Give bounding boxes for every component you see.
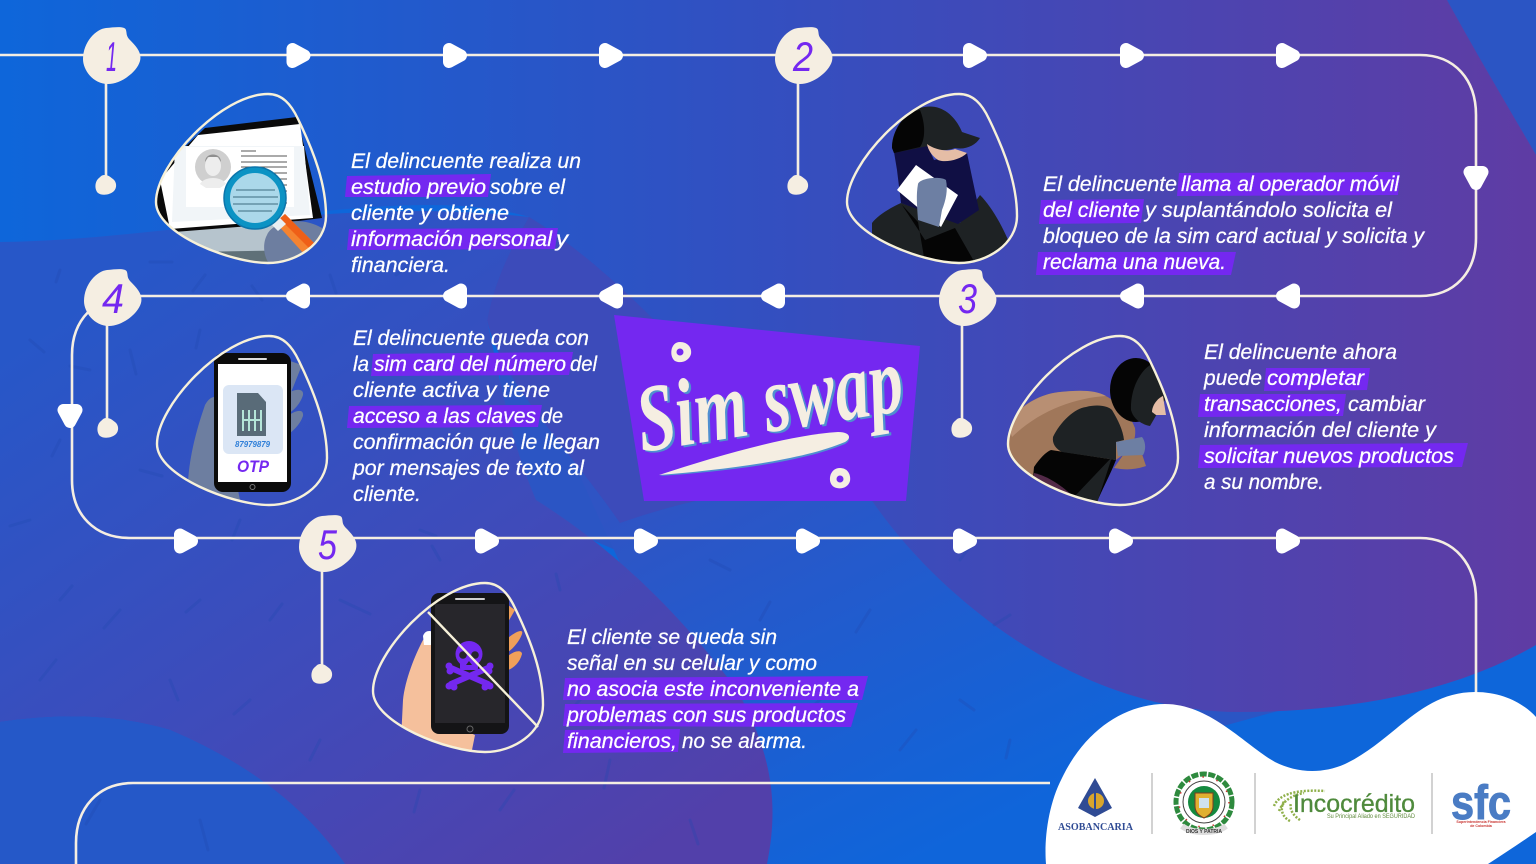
text: step 5: El cliente se queda sin — [567, 626, 777, 649]
text: step 4: sim card del número — [374, 353, 566, 376]
illustration: thief with sack — [1005, 336, 1178, 510]
text: step 2: del cliente — [1043, 199, 1140, 222]
text: step 5 — [563, 626, 868, 753]
text: step 4: confirmación que le llegan — [353, 431, 600, 454]
text: step 5: financieros, — [567, 730, 677, 753]
illustration: phone with skull, crossed out — [373, 583, 543, 760]
text: step 5: no asocia este inconveniente a — [567, 678, 859, 701]
logo: Asobancaria: ASOBANCARIA — [1058, 821, 1133, 833]
text: step 3: El delincuente ahora — [1204, 341, 1397, 364]
stem end dots — [95, 175, 972, 684]
step badge 2 — [775, 27, 832, 84]
text: step 4 — [347, 327, 600, 506]
logo: Policía Nacional: DIOS Y PATRIA — [1186, 829, 1222, 835]
text: step 4: por mensajes de texto al — [352, 457, 585, 480]
text: step 5: no se alarma. — [682, 730, 807, 753]
title panel: Sim swap — [614, 315, 920, 501]
arrows — [64, 49, 1482, 548]
text: step 4: del — [570, 353, 598, 376]
text: step 4: la — [353, 353, 369, 376]
logo: sfc: sfc — [1451, 777, 1511, 830]
text: step 1: El delincuente realiza un — [351, 150, 581, 173]
text: step 3: transacciones, — [1204, 393, 1342, 416]
illustration: phone with OTP: 87979879 — [235, 440, 271, 449]
text: step 3: cambiar — [1348, 393, 1426, 416]
illustration: laptop and magnifier — [150, 94, 326, 264]
text: step 3: información del cliente y — [1204, 419, 1438, 442]
illustration: phone with OTP: OTP — [237, 457, 270, 476]
text: step 3: puede — [1203, 367, 1262, 390]
text: step 2 — [1036, 172, 1426, 275]
logo: sfc: de Colombia — [1470, 824, 1493, 828]
dashes — [10, 262, 1010, 850]
title shadow and lettering: Sim swap — [631, 327, 912, 474]
text: step 1: financiera. — [351, 254, 450, 277]
logo: sfc: Superintendencia Financiera — [1456, 820, 1507, 824]
title shadow and lettering: Sim swap — [629, 325, 910, 473]
text: step 5: problemas con sus productos — [566, 704, 847, 727]
illustration: masked caller — [847, 94, 1017, 263]
text: step 4: cliente activa y tiene — [353, 379, 550, 402]
logo: Policía Nacional — [1176, 774, 1232, 835]
text: step 4: El delincuente queda con — [353, 327, 589, 350]
text: step 1: estudio previo — [351, 176, 486, 199]
logo: Incocrédito: Su Principal Aliado en SEGURIDAD — [1327, 814, 1416, 820]
text: step 2: llama al operador móvil — [1181, 173, 1400, 196]
text: step 2: El delincuente — [1043, 173, 1177, 196]
title shadow and lettering — [629, 325, 912, 475]
step badge 3 — [939, 269, 996, 326]
text: step 2: reclama una nueva. — [1043, 251, 1226, 274]
text: step 3: completar — [1267, 367, 1365, 390]
logo: Incocrédito: Incocrédito — [1293, 790, 1415, 818]
text: step 4: de — [541, 405, 563, 428]
text: step 1 — [345, 150, 581, 277]
text: step 3: solicitar nuevos productos — [1204, 445, 1455, 468]
icon: skull and crossbones — [446, 641, 494, 690]
text: step 2: bloqueo de la sim card actual y solicita y — [1043, 225, 1426, 248]
step badge 3: 3 — [958, 275, 977, 322]
text: step 1: información personal — [351, 228, 553, 251]
step badge 5 — [299, 515, 356, 572]
logo area: white wave — [1046, 692, 1536, 864]
step badge 4: 4 — [102, 275, 124, 322]
text: step 4: acceso a las claves — [353, 405, 536, 428]
text: step 4: cliente. — [353, 483, 421, 506]
text: step 1: sobre el — [490, 176, 566, 199]
logo: Asobancaria — [1058, 778, 1133, 833]
text: step 1: y — [554, 228, 570, 251]
text: step 1: cliente y obtiene — [351, 202, 509, 225]
text: step 2: y suplantándolo solicita el — [1143, 199, 1393, 222]
step badge 4 — [84, 269, 141, 326]
step badge 1 — [83, 27, 140, 84]
step badge 5: 5 — [318, 521, 338, 568]
text: step 3 — [1198, 341, 1468, 494]
illustration: phone with OTP — [157, 336, 327, 505]
step badge 2: 2 — [792, 33, 813, 80]
text: step 5: señal en su celular y como — [567, 652, 817, 675]
text: step 3: a su nombre. — [1204, 471, 1324, 494]
step badge 1: 1 — [106, 33, 117, 80]
